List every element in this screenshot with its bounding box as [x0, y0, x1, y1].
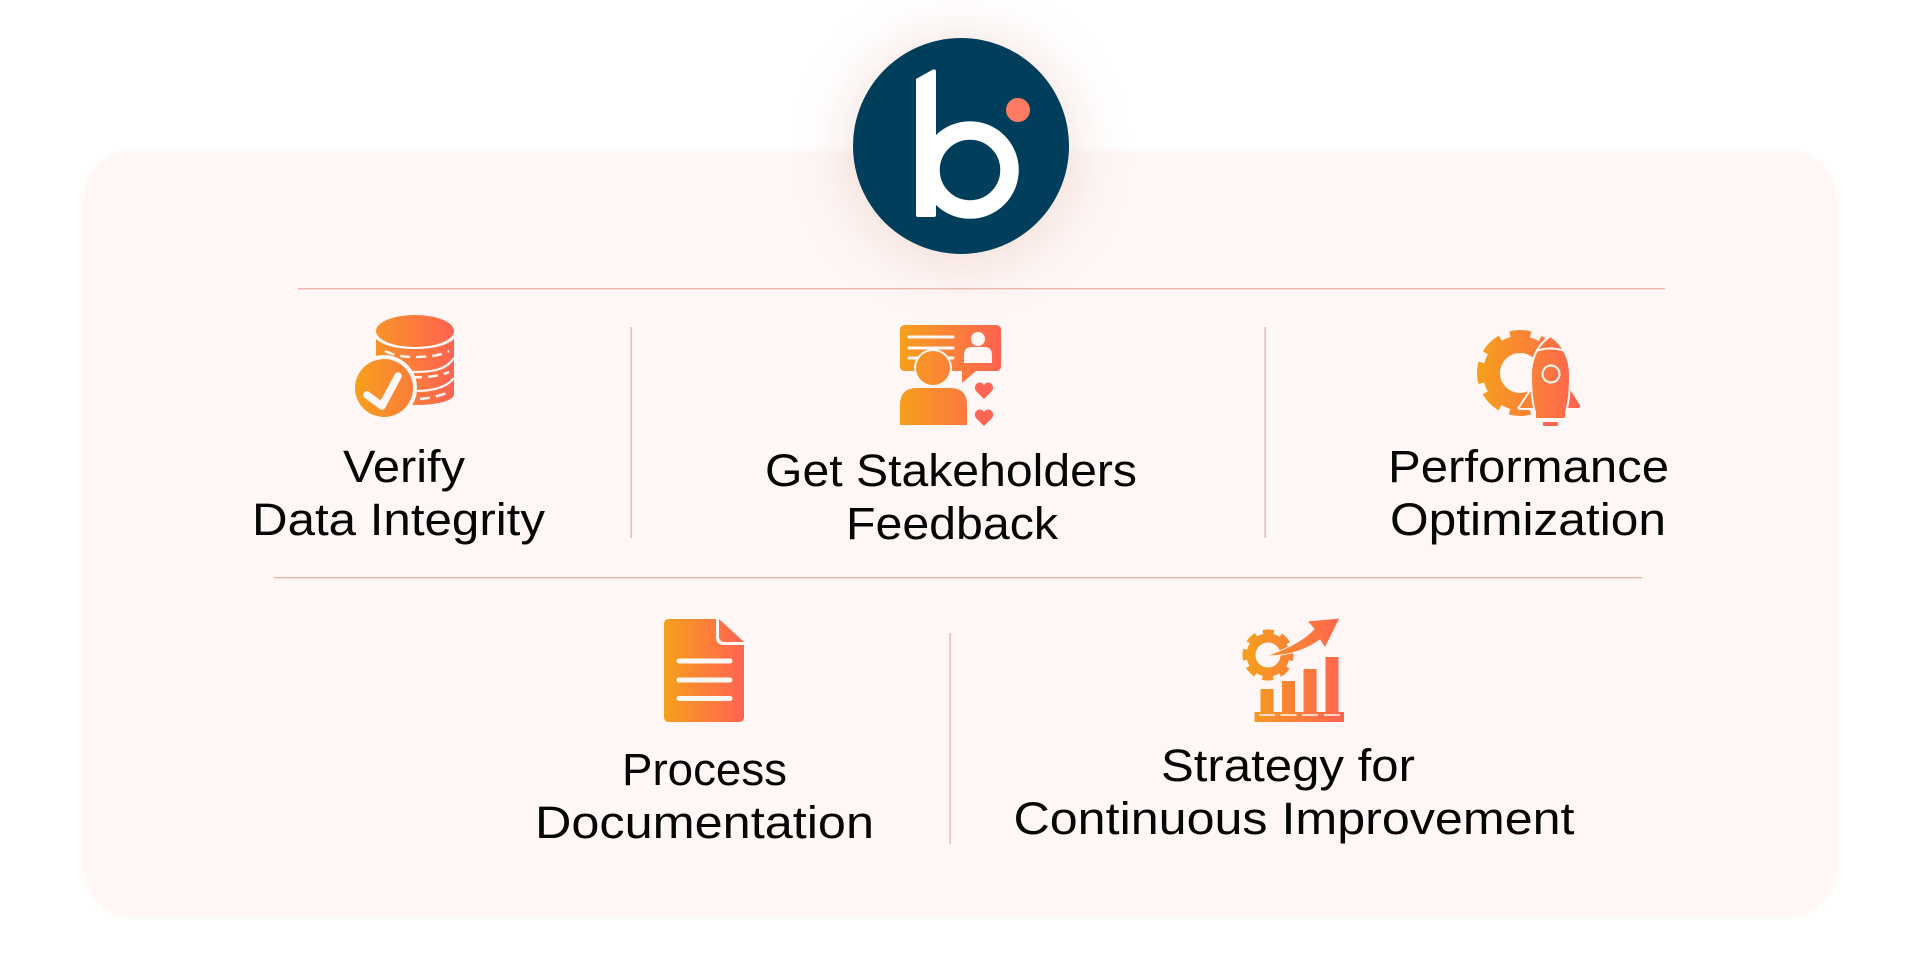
- divider: vertical 3: [950, 633, 951, 844]
- label: Verify Data Integrity: Data Integrity: [252, 494, 546, 545]
- label: Process Documentation: Process: [622, 744, 787, 795]
- label: Verify Data Integrity: [252, 441, 546, 545]
- label: Verify Data Integrity: Verify: [343, 441, 466, 492]
- label: Get Stakeholders Feedback: Feedback: [846, 498, 1059, 549]
- logo letter b: [916, 69, 1010, 217]
- logo dot: [1006, 98, 1030, 122]
- panel: background card: [82, 150, 1838, 918]
- label: Performance Optimization: Optimization: [1390, 494, 1666, 545]
- icon: document: [664, 619, 744, 722]
- icon: gear and rocket: [1482, 335, 1581, 426]
- label: Strategy for Continuous Improvement: Strategy for: [1161, 740, 1415, 791]
- label: Process Documentation: [535, 744, 874, 848]
- divider: top row upper: [298, 288, 1665, 289]
- divider: vertical 2: [1264, 327, 1266, 538]
- label: Get Stakeholders Feedback: [765, 445, 1137, 549]
- label: Get Stakeholders Feedback: Get Stakeholders: [765, 445, 1137, 496]
- logo badge: [843, 32, 1079, 268]
- label: Strategy for Continuous Improvement: Continuous Improvement: [1014, 793, 1575, 844]
- icon: database with check: [351, 315, 454, 421]
- icon: stakeholder feedback: [900, 325, 1001, 426]
- label: Performance Optimization: Performance: [1388, 441, 1669, 492]
- icon: strategy growth chart: [1246, 618, 1344, 722]
- divider: between rows: [274, 577, 1642, 578]
- label: Strategy for Continuous Improvement: [1014, 740, 1575, 844]
- divider: vertical 1: [630, 327, 632, 538]
- label: Performance Optimization: [1388, 441, 1669, 545]
- label: Process Documentation: Documentation: [535, 797, 874, 848]
